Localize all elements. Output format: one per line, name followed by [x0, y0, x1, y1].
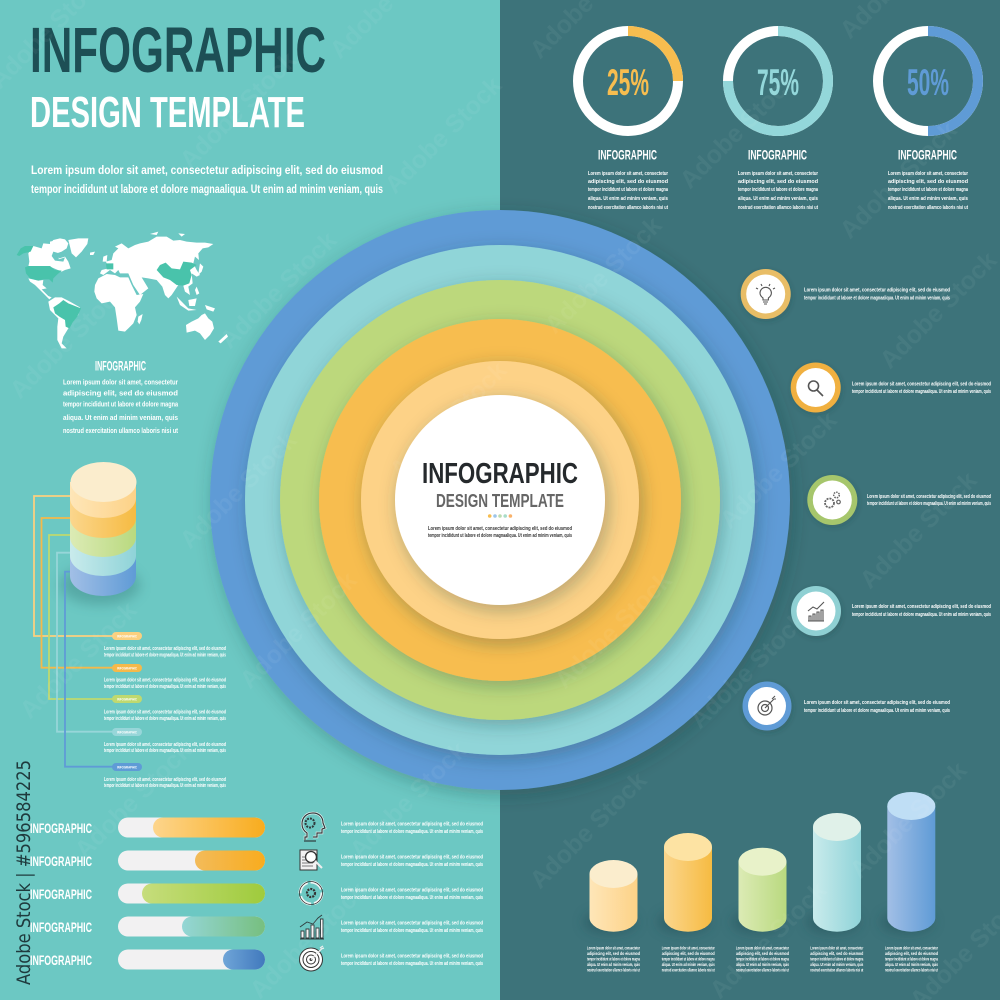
cylinder caption 2: Lorem ipsum dolor sit amet, consectetur	[662, 946, 715, 950]
pill item 4: INFOGRAPHIC	[117, 730, 137, 735]
bar row 5	[30, 950, 483, 970]
watermark overlay: Adobe Stock	[539, 211, 667, 339]
cylinder caption 2	[662, 946, 715, 972]
map caption body: aliqua. Ut enim ad minim veniam, quis	[63, 415, 178, 422]
donut caption 2: aliqua. Ut enim ad minim veniam, quis	[738, 196, 818, 202]
map lake: hudson bay	[52, 252, 65, 262]
pill item 4: tempor incididunt ut labore et dolore magnaaliqua. Ut enim ad minim veniam, quis	[104, 748, 226, 754]
watermark overlay: Adobe Stock	[684, 606, 812, 734]
item: light bulb: Lorem ipsum dolor sit amet, consectetur adipiscing elit, sed do eiusmod	[804, 288, 950, 294]
watermark overlay: Adobe Stock	[214, 226, 342, 354]
pill item 2: tempor incididunt ut labore et dolore magnaaliqua. Ut enim ad minim veniam, quis	[104, 684, 226, 690]
pill item 1	[104, 632, 226, 658]
donut caption 1: aliqua. Ut enim ad minim veniam, quis	[588, 196, 668, 202]
donut caption 1: nostrud exercitation ullamco laboris nisi ut	[588, 205, 668, 211]
donut: 25%	[578, 31, 678, 131]
donut caption 1: Lorem ipsum dolor sit amet, consectetur	[588, 171, 669, 177]
cylinder caption 1: tempor incididunt ut labore et dolore magna	[587, 956, 640, 962]
pill item 2	[104, 664, 226, 690]
watermark overlay: Adobe Stock	[714, 406, 842, 534]
cylinder caption 3: adipiscing elit, sed do eiusmod	[736, 951, 789, 956]
watermark overlay: Adobe Stock	[4, 276, 132, 404]
item: light bulb	[741, 269, 950, 319]
donut caption 1: INFOGRAPHIC	[598, 146, 657, 162]
cylinder top	[70, 462, 136, 502]
center text	[422, 458, 578, 539]
cylinder layer: orange	[70, 498, 136, 538]
pill item 5: INFOGRAPHIC	[117, 765, 137, 770]
background: right panel	[500, 0, 1000, 1000]
map caption body	[63, 380, 179, 435]
map caption body: nostrud exercitation ullamco laboris nisi ut	[63, 428, 179, 435]
watermark overlay: Adobe Stock	[384, 356, 512, 484]
cylinder bar 1	[584, 860, 638, 933]
pill item 5: Lorem ipsum dolor sit amet, consectetur adipiscing elit, sed do eiusmod	[104, 777, 226, 783]
subheading: design template: DESIGN TEMPLATE	[30, 88, 305, 137]
item: gears	[807, 475, 991, 525]
cylinder caption 4: aliqua. Ut enim ad minim veniam, quis	[810, 962, 864, 967]
cylinder caption 2: tempor incididunt ut labore et dolore magna	[662, 956, 715, 962]
watermark overlay: Adobe Stock	[844, 756, 972, 884]
donut: 50%: 50%	[907, 62, 949, 103]
connector lines	[34, 496, 113, 767]
bar row 5: INFOGRAPHIC	[30, 952, 92, 968]
intro text: Lorem ipsum dolor sit amet, consectetur adipiscing elit, sed do eiusmod	[31, 163, 383, 177]
cylinder caption 3	[736, 946, 789, 972]
donut: 50%	[878, 31, 978, 131]
icon: circular process gear	[300, 882, 322, 904]
stock id side label: Adobe Stock | #596584225	[13, 760, 35, 985]
bar row 1	[30, 818, 483, 838]
donut caption 1	[588, 146, 669, 211]
progress bars	[30, 818, 483, 970]
heading: infographic: INFOGRAPHIC	[30, 14, 326, 86]
center heading: INFOGRAPHIC	[422, 458, 578, 490]
ring: green	[280, 280, 720, 720]
cylinder caption 4: tempor incididunt ut labore et dolore magna	[810, 956, 864, 962]
background: left panel	[0, 0, 500, 1000]
bar row 2: INFOGRAPHIC	[30, 853, 92, 869]
donut caption 1: adipiscing elit, sed do eiusmod	[588, 179, 668, 185]
center body text: tempor incididunt ut labore et dolore magnaaliqua. Ut enim ad minim veniam, quis	[428, 533, 572, 539]
center white disc	[395, 395, 605, 605]
intro text	[31, 163, 383, 196]
center body text: Lorem ipsum dolor sit amet, consectetur adipiscing elit, sed do eiusmod	[428, 526, 572, 532]
bar row 1: INFOGRAPHIC	[30, 820, 92, 836]
pill item 3: tempor incididunt ut labore et dolore magnaaliqua. Ut enim ad minim veniam, quis	[104, 716, 226, 722]
watermark overlay: Adobe Stock	[234, 566, 362, 694]
title block	[30, 14, 383, 196]
cylinder caption 3: nostrud exercitation ullamco laboris nisi ut	[736, 968, 789, 972]
ring: orange	[319, 319, 681, 681]
donut caption 3: tempor incididunt ut labore et dolore magna	[888, 187, 969, 193]
watermark overlay: Adobe Stock	[524, 766, 652, 894]
cylinder caption 3: tempor incididunt ut labore et dolore magna	[736, 956, 789, 962]
bar row 5: Lorem ipsum dolor sit amet, consectetur adipiscing elit, sed do eiusmod	[341, 954, 483, 960]
cylinder caption 1	[587, 946, 640, 972]
pill item 5: tempor incididunt ut labore et dolore magnaaliqua. Ut enim ad minim veniam, quis	[104, 783, 226, 789]
bar row 4: tempor incididunt ut labore et dolore magnaaliqua. Ut enim ad minim veniam, quis	[341, 928, 483, 934]
donut caption 2	[738, 146, 819, 211]
cylinder layer: light orange	[70, 482, 136, 518]
bar row 1: tempor incididunt ut labore et dolore magnaaliqua. Ut enim ad minim veniam, quis	[341, 829, 483, 835]
cylinder caption 1: Lorem ipsum dolor sit amet, consectetur	[587, 946, 640, 950]
bar row 5: tempor incididunt ut labore et dolore magnaaliqua. Ut enim ad minim veniam, quis	[341, 961, 483, 967]
center body text	[428, 526, 572, 539]
item: target	[742, 682, 950, 730]
pill item 2: Lorem ipsum dolor sit amet, consectetur adipiscing elit, sed do eiusmod	[104, 678, 226, 684]
cylinder caption 5: aliqua. Ut enim ad minim veniam, quis	[885, 962, 938, 967]
ring: blue	[210, 210, 790, 790]
cylinder caption 3: Lorem ipsum dolor sit amet, consectetur	[736, 946, 789, 950]
bar row 4	[30, 916, 483, 936]
donut stats	[578, 31, 978, 211]
intro text: tempor incididunt ut labore et dolore magnaaliqua. Ut enim ad minim veniam, quis	[31, 182, 383, 196]
cylinder bar 5	[881, 792, 935, 933]
map caption body: adipiscing elit, sed do eiusmod	[63, 390, 178, 398]
watermark overlay: Adobe Stock	[14, 596, 142, 724]
pill item 3: Lorem ipsum dolor sit amet, consectetur adipiscing elit, sed do eiusmod	[104, 710, 226, 716]
donut caption 2: tempor incididunt ut labore et dolore magna	[738, 187, 819, 193]
bar row 4: Lorem ipsum dolor sit amet, consectetur adipiscing elit, sed do eiusmod	[341, 920, 483, 926]
watermark overlay: Adobe Stock	[834, 116, 962, 244]
cylinder caption 5: nostrud exercitation ullamco laboris nisi ut	[885, 968, 938, 972]
cylinder layer: green	[70, 518, 136, 557]
donut caption 3: nostrud exercitation ullamco laboris nisi ut	[888, 205, 968, 211]
item: magnifier	[791, 362, 991, 412]
icon: growth chart	[300, 915, 324, 939]
cylinder caption 4	[810, 946, 864, 972]
center subheading: DESIGN TEMPLATE	[436, 491, 564, 511]
map caption body: Lorem ipsum dolor sit amet, consectetur	[63, 380, 178, 386]
donut: 25%: 25%	[607, 62, 649, 103]
donut caption 3: Lorem ipsum dolor sit amet, consectetur	[888, 171, 969, 177]
cylinder caption 2: aliqua. Ut enim ad minim veniam, quis	[662, 962, 715, 967]
cylinder caption 4: Lorem ipsum dolor sit amet, consectetur	[810, 946, 863, 950]
donut caption 2: Lorem ipsum dolor sit amet, consectetur	[738, 171, 819, 177]
cylinder caption 5: tempor incididunt ut labore et dolore magna	[885, 956, 938, 962]
pill item 4: Lorem ipsum dolor sit amet, consectetur adipiscing elit, sed do eiusmod	[104, 742, 226, 748]
pill item 2: INFOGRAPHIC	[117, 666, 137, 671]
cylinder bar 3	[732, 848, 786, 933]
cylinder caption 5: adipiscing elit, sed do eiusmod	[885, 951, 938, 956]
cylinder caption 5	[885, 946, 938, 972]
cylinder caption 3: aliqua. Ut enim ad minim veniam, quis	[736, 962, 789, 967]
pill item 3: INFOGRAPHIC	[117, 697, 137, 702]
donut caption 1: tempor incididunt ut labore et dolore magna	[588, 187, 669, 193]
cylinder caption 5: Lorem ipsum dolor sit amet, consectetur	[885, 946, 938, 950]
bar row 3: Lorem ipsum dolor sit amet, consectetur adipiscing elit, sed do eiusmod	[341, 888, 483, 894]
icon: head with gear	[302, 813, 325, 841]
pill item 3	[104, 695, 226, 722]
pill item 1: Lorem ipsum dolor sit amet, consectetur adipiscing elit, sed do eiusmod	[104, 646, 226, 652]
watermark overlay: Adobe Stock	[69, 736, 197, 864]
bar row 2: Lorem ipsum dolor sit amet, consectetur adipiscing elit, sed do eiusmod	[341, 854, 483, 860]
watermark overlay: Adobe Stock	[874, 246, 1000, 374]
left list of pills	[104, 632, 226, 789]
item: chart	[791, 586, 991, 636]
3d cylinder chart	[584, 792, 938, 972]
cylinder caption 2: nostrud exercitation ullamco laboris nisi ut	[662, 968, 715, 972]
pill item 4	[104, 728, 226, 754]
cylinder caption 4: nostrud exercitation ullamco laboris nisi ut	[810, 968, 864, 972]
donut: 75%: 75%	[757, 62, 799, 103]
cylinder caption 1: nostrud exercitation ullamco laboris nisi ut	[587, 968, 640, 972]
donut caption 3	[888, 146, 969, 211]
ring: light teal	[245, 245, 755, 755]
world map	[17, 232, 228, 348]
watermark overlay: Adobe Stock	[549, 566, 677, 694]
donut: 75%	[728, 31, 828, 131]
cylinder bar 4	[807, 813, 861, 933]
icon: document with magnifier	[300, 850, 322, 870]
donut caption 2: nostrud exercitation ullamco laboris nisi ut	[738, 205, 818, 211]
watermark overlay: Adobe Stock	[854, 466, 982, 594]
donut caption 3: aliqua. Ut enim ad minim veniam, quis	[888, 196, 968, 202]
center colored dots	[488, 514, 512, 518]
bar row 4: INFOGRAPHIC	[30, 919, 92, 935]
cylinder layer: light teal	[70, 537, 136, 576]
bar row 1: Lorem ipsum dolor sit amet, consectetur adipiscing elit, sed do eiusmod	[341, 822, 483, 828]
text block: map caption	[63, 358, 179, 435]
stacked cylinder	[60, 462, 140, 605]
icon: target	[300, 946, 324, 971]
cylinder shadow	[60, 565, 140, 605]
watermark overlay: Adobe Stock	[174, 426, 302, 554]
pill item 5	[104, 763, 226, 789]
cylinder caption 1: adipiscing elit, sed do eiusmod	[587, 951, 640, 956]
bar row 3: INFOGRAPHIC	[30, 886, 92, 902]
watermark overlay: Adobe Stock	[379, 71, 507, 199]
watermark overlay: Adobe Stock	[674, 66, 802, 194]
concentric circles	[210, 210, 790, 790]
donut caption 3: adipiscing elit, sed do eiusmod	[888, 179, 968, 185]
donut caption 2: adipiscing elit, sed do eiusmod	[738, 179, 818, 185]
watermark overlay: Adobe Stock	[174, 46, 302, 174]
bar row 2: tempor incididunt ut labore et dolore magnaaliqua. Ut enim ad minim veniam, quis	[341, 862, 483, 868]
cylinder layer: blue	[70, 556, 136, 596]
cylinder bar 2	[658, 833, 712, 933]
map caption body: tempor incididunt ut labore et dolore magna	[63, 402, 178, 408]
watermark overlay: Adobe Stock	[344, 736, 472, 864]
donut caption 2: INFOGRAPHIC	[748, 146, 807, 162]
bar row 3: tempor incididunt ut labore et dolore magnaaliqua. Ut enim ad minim veniam, quis	[341, 895, 483, 901]
pill item 1: tempor incididunt ut labore et dolore magnaaliqua. Ut enim ad minim veniam, quis	[104, 652, 226, 658]
cylinder caption 1: aliqua. Ut enim ad minim veniam, quis	[587, 962, 640, 967]
map caption heading: INFOGRAPHIC	[95, 358, 146, 374]
bar row 3	[30, 884, 483, 904]
cylinder caption 4: adipiscing elit, sed do eiusmod	[810, 951, 863, 956]
pill item 1: INFOGRAPHIC	[117, 634, 137, 639]
bar row 2	[30, 850, 483, 870]
ring: light orange	[361, 361, 639, 639]
item: target: Lorem ipsum dolor sit amet, consectetur adipiscing elit, sed do eiusmod	[804, 700, 950, 706]
cylinder caption 2: adipiscing elit, sed do eiusmod	[662, 951, 715, 956]
donut caption 3: INFOGRAPHIC	[898, 146, 957, 162]
right icon list	[741, 269, 991, 730]
outline icons next to bars	[300, 813, 325, 971]
